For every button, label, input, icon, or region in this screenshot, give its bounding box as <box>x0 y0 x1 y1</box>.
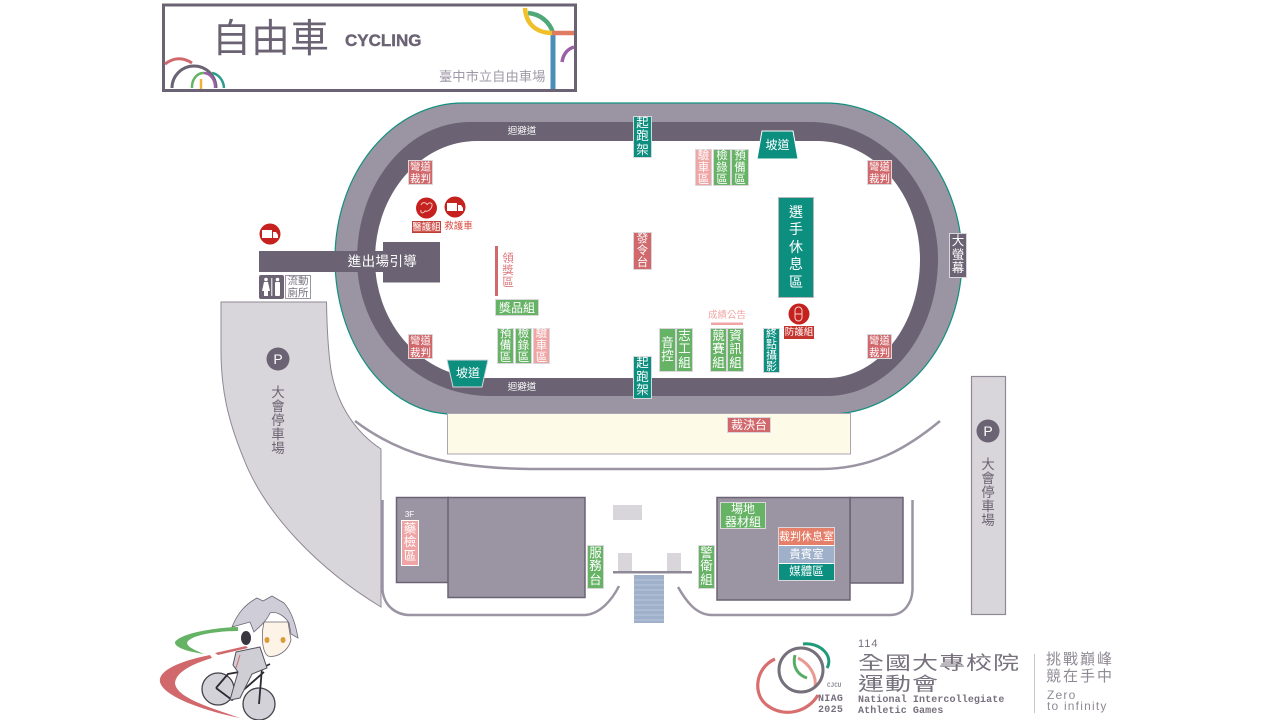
icon: medical team <box>416 198 437 218</box>
curve judge bottom right: 裁判 <box>869 346 890 358</box>
athlete rest area <box>778 197 814 298</box>
left parking text <box>271 385 285 456</box>
media area: 媒體區 <box>789 566 824 578</box>
top bypass label: 迴避道 <box>508 126 536 137</box>
logo english name: National Intercollegiate <box>858 695 1004 706</box>
right parking text: 大 <box>981 457 995 472</box>
logo slogan <box>1046 651 1114 685</box>
venue name: 臺中市立自由車場 <box>439 69 545 84</box>
curve judge bottom right <box>867 334 892 359</box>
final judge stand: 裁決台 <box>731 418 767 432</box>
icon: protection team <box>788 304 810 324</box>
curve judge bottom left: 彎道 <box>410 334 431 346</box>
subtitle english: CYCLING <box>345 31 422 50</box>
judging stand area <box>448 414 850 454</box>
logo games name: 運動會 <box>858 673 939 695</box>
icon: rescue vehicle <box>444 196 466 218</box>
ramp bottom <box>447 360 488 387</box>
top prep: 預 <box>734 150 746 162</box>
volunteer team: 組 <box>678 356 691 370</box>
bottom prep: 備 <box>500 340 511 352</box>
doping control: 檢 <box>404 535 416 549</box>
logo 114: 114 <box>858 638 879 650</box>
left parking text: 大 <box>271 385 285 400</box>
curve judge bottom left <box>408 334 433 359</box>
VIP room <box>779 546 834 563</box>
security team <box>698 545 715 589</box>
entry guide text: 進出場引導 <box>348 254 417 269</box>
curve judge top right <box>867 160 892 185</box>
bottom start rack <box>633 356 652 399</box>
venue equipment team: 場地 <box>731 502 755 516</box>
results line <box>711 322 743 325</box>
icon: left parking P <box>266 348 290 370</box>
athlete rest area: 手 <box>789 221 803 237</box>
top registration <box>713 149 731 186</box>
mascot cyclist <box>160 596 298 720</box>
logo slogan english: Zero <box>1047 688 1076 702</box>
athlete rest area: 息 <box>789 256 803 272</box>
bottom vehicle check: 區 <box>536 352 547 364</box>
bottom start rack: 架 <box>636 383 649 397</box>
left buildings <box>396 498 585 598</box>
right parking text: 會 <box>981 471 995 486</box>
award area label <box>502 252 514 289</box>
security team: 衛 <box>700 559 713 573</box>
curve judge top right: 裁判 <box>869 172 890 184</box>
left parking lot <box>221 302 381 607</box>
bottom vehicle check: 車 <box>536 340 547 352</box>
doping control: 區 <box>404 549 416 563</box>
left parking text: 停 <box>271 413 285 428</box>
logo slogan english <box>1047 688 1108 713</box>
information team <box>727 328 744 372</box>
big screen <box>949 233 967 278</box>
right parking text: 停 <box>981 485 995 500</box>
curve judge bottom right: 彎道 <box>869 334 890 346</box>
outer walkway curve <box>355 421 940 469</box>
icon: right parking P <box>976 420 1000 442</box>
service desk: 台 <box>589 573 602 587</box>
top registration: 區 <box>716 174 728 186</box>
logo games name: 全國大專校院 <box>858 652 1020 674</box>
service desk: 服 <box>589 546 602 560</box>
logo slogan: 挑戰巔峰 <box>1046 651 1114 668</box>
stairs <box>634 575 664 623</box>
logo slogan english: to infinity <box>1047 699 1108 713</box>
logo small text CJCU: CJCU <box>827 682 841 689</box>
outer track <box>335 103 962 414</box>
sound control: 音 <box>661 336 674 350</box>
icon: ambulance entrance <box>260 224 280 244</box>
award area label: 區 <box>502 277 514 289</box>
bottom start rack: 跑 <box>636 370 649 384</box>
rescue vehicle label: 救護車 <box>444 221 473 232</box>
athlete rest area: 區 <box>789 274 803 290</box>
logo english name: Athletic Games <box>858 706 943 717</box>
portable toilet label: 廁所 <box>288 287 308 299</box>
inner track band <box>357 122 938 396</box>
left parking text: 場 <box>271 441 285 456</box>
right parking lot <box>972 376 1006 614</box>
top start rack: 架 <box>636 143 649 157</box>
top vehicle check: 車 <box>698 162 709 174</box>
bottom start rack: 起 <box>636 356 649 370</box>
bottom ramp label: 坡道 <box>456 366 480 380</box>
logo rings <box>758 644 829 712</box>
curve judge top left <box>408 160 433 185</box>
bottom prep: 區 <box>500 352 511 364</box>
starter stand: 令 <box>637 245 648 257</box>
entrance structures <box>613 505 692 574</box>
top prep <box>731 149 749 186</box>
logo year: 2025 <box>818 705 843 716</box>
finish photo: 影 <box>766 360 777 372</box>
starter stand <box>633 232 652 270</box>
big screen: 螢 <box>952 248 964 262</box>
right lower path <box>678 500 912 615</box>
portable toilet label <box>285 275 311 299</box>
right buildings <box>717 498 903 600</box>
bottom vehicle check: 驗 <box>536 328 547 340</box>
top vehicle check: 驗 <box>698 150 709 162</box>
logo slogan: 競在手中 <box>1046 668 1114 685</box>
information team: 組 <box>729 356 742 370</box>
icon: left parking P: P <box>273 351 283 367</box>
big screen: 幕 <box>952 261 964 275</box>
ramp top <box>757 131 798 159</box>
big screen: 大 <box>952 234 964 248</box>
floor label: 3F <box>405 510 414 519</box>
top prep: 區 <box>734 174 746 186</box>
venue equipment team: 器材組 <box>725 514 761 528</box>
curve judge top left: 裁判 <box>410 172 431 184</box>
logo year <box>818 694 843 716</box>
title: 自由車 <box>212 18 329 61</box>
bottom registration: 錄 <box>518 340 529 352</box>
top ramp label: 坡道 <box>765 138 790 152</box>
competition team: 競 <box>712 329 725 343</box>
bottom registration: 檢 <box>518 328 529 340</box>
right parking text: 車 <box>981 499 995 514</box>
left parking text: 車 <box>271 427 285 442</box>
sound control: 控 <box>661 349 674 363</box>
rooms stack <box>778 527 835 581</box>
service desk: 務 <box>589 559 602 573</box>
volunteer team: 志 <box>678 329 691 343</box>
right parking text: 場 <box>981 513 995 528</box>
bottom vehicle check <box>533 328 550 364</box>
finish photo <box>763 328 780 373</box>
prizes team: 獎品組 <box>499 300 535 314</box>
volunteer team: 工 <box>678 342 691 356</box>
doping control: 藥 <box>404 522 416 536</box>
left lower path <box>382 500 619 615</box>
starter stand: 台 <box>637 257 648 269</box>
prizes team <box>495 299 539 316</box>
finish photo: 終 <box>766 328 777 340</box>
left parking text: 會 <box>271 399 285 414</box>
right parking text <box>981 457 995 528</box>
award area label: 領 <box>502 253 514 265</box>
logo games name <box>858 652 1020 695</box>
finish photo: 攝 <box>766 350 777 362</box>
VIP room: 貴賓室 <box>789 548 824 560</box>
bottom bypass label: 迴避道 <box>508 382 536 393</box>
volunteer team <box>676 328 693 372</box>
protection team label: 防護組 <box>785 326 813 338</box>
top prep: 備 <box>734 162 746 174</box>
athlete rest area: 休 <box>789 239 803 255</box>
information team: 資 <box>729 329 742 343</box>
logo english name <box>858 694 1004 717</box>
curve judge bottom left: 裁判 <box>410 346 431 358</box>
security team: 警 <box>700 546 713 560</box>
icon: right parking P: P <box>983 423 993 439</box>
curve judge top right: 彎道 <box>869 160 890 172</box>
venue equipment team <box>720 502 766 529</box>
top registration: 錄 <box>716 162 728 174</box>
top start rack <box>633 116 652 158</box>
icon: restroom <box>259 275 284 299</box>
starter stand: 發 <box>637 233 648 245</box>
bottom prep <box>497 328 514 364</box>
top start rack: 起 <box>636 116 649 130</box>
competition team <box>710 328 727 372</box>
top start rack: 跑 <box>636 129 649 143</box>
header panel <box>164 5 576 90</box>
award area label: 獎 <box>502 265 514 277</box>
logo year: NIAG <box>818 694 843 705</box>
portable toilet label: 流動 <box>288 275 308 287</box>
top vehicle check: 區 <box>698 174 709 186</box>
service desk <box>587 545 604 589</box>
competition team: 賽 <box>712 342 725 356</box>
logo divider <box>1034 654 1035 713</box>
top vehicle check <box>695 149 712 186</box>
bottom registration: 區 <box>518 352 529 364</box>
finish photo: 點 <box>766 338 777 350</box>
doping control <box>401 520 419 566</box>
award line <box>495 246 498 296</box>
medical team label: 醫護組 <box>412 222 441 232</box>
bottom registration <box>515 328 532 364</box>
athlete rest area: 選 <box>789 204 803 220</box>
infield <box>375 141 920 378</box>
information team: 訊 <box>729 342 742 356</box>
top registration: 檢 <box>716 150 728 162</box>
bottom prep: 預 <box>500 328 511 340</box>
competition team: 組 <box>712 356 725 370</box>
media area <box>779 564 834 580</box>
judges lounge: 裁判休息室 <box>779 530 834 542</box>
results notice: 成績公告 <box>708 310 746 321</box>
entry guide band <box>259 242 440 282</box>
curve judge top left: 彎道 <box>410 160 431 172</box>
security team: 組 <box>700 573 713 587</box>
sound control <box>659 328 676 372</box>
